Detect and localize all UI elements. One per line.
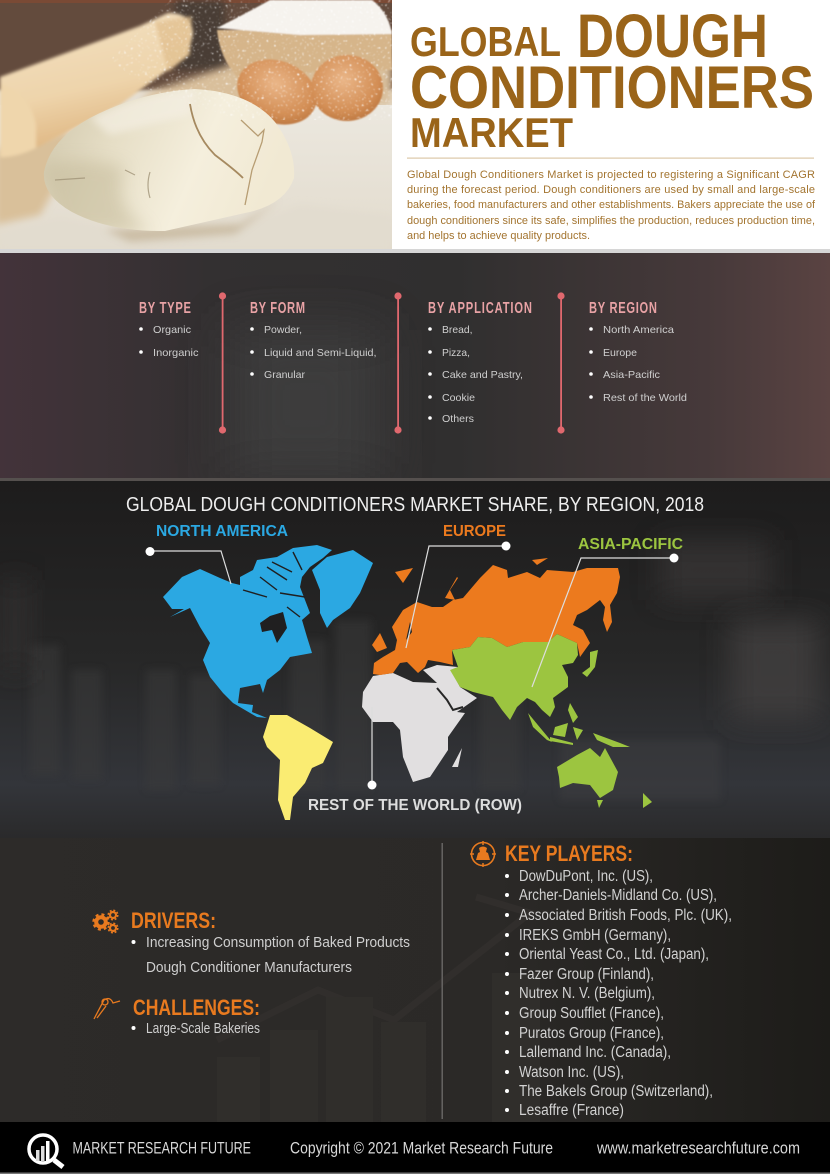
segment dividers — [219, 292, 565, 434]
asia pacific — [450, 634, 652, 808]
footer: Copyright © 2021 Market Research Future — [290, 1140, 553, 1158]
header photo: dough, rolling pin, eggs and flour — [0, 0, 410, 249]
column: by application: Cookie — [442, 392, 475, 404]
column: by form — [250, 299, 376, 381]
column: by application — [428, 299, 532, 425]
panel: drivers, challenges and key players — [0, 838, 830, 1122]
column: by region: Asia-Pacific — [603, 369, 660, 381]
column: by region: North America — [603, 324, 674, 336]
callout: north america: NORTH AMERICA — [156, 523, 288, 540]
europe and russia — [372, 558, 620, 675]
column: by region: BY REGION — [589, 299, 657, 316]
eggs — [236, 54, 384, 126]
intro paragraph: bakeries, food manufacturers and other establishments. Bakers appreciate the use of — [407, 199, 816, 211]
greenland — [312, 550, 373, 628]
icon: gears — [93, 910, 118, 933]
dough ball — [40, 89, 294, 232]
drivers: Dough Conditioner Manufacturers — [146, 960, 352, 976]
key players: Puratos Group (France), — [519, 1025, 664, 1042]
column: by form: Powder, — [264, 324, 302, 336]
callout: europe — [406, 523, 510, 648]
north america — [158, 545, 373, 718]
key players — [470, 841, 732, 1119]
africa and middle east — [362, 665, 477, 782]
callout: asia-pacific: ASIA-PACIFIC — [578, 536, 683, 553]
key players: Watson Inc. (US), — [519, 1064, 624, 1081]
challenges: CHALLENGES: — [133, 995, 260, 1020]
flour specks — [110, 0, 392, 125]
callout: rest of the world: REST OF THE WORLD (ROW) — [308, 797, 522, 814]
rolling pin — [0, 13, 193, 157]
column: by application: Pizza, — [442, 347, 470, 359]
title: market: MARKET — [410, 109, 573, 156]
callout: north america — [146, 523, 288, 584]
icon: uphill climber — [94, 999, 120, 1019]
challenges — [94, 995, 260, 1037]
key players: Nutrex N. V. (Belgium), — [519, 985, 655, 1002]
column: by type: BY TYPE — [139, 299, 191, 316]
drivers — [93, 908, 410, 976]
key players: Fazer Group (Finland), — [519, 966, 654, 983]
title: global: GLOBAL — [410, 18, 561, 65]
column: by application: Others — [442, 413, 474, 425]
footer: MARKET RESEARCH FUTURE — [72, 1140, 251, 1158]
arctic straits — [243, 552, 305, 617]
column: by form: Liquid and Semi-Liquid, — [264, 347, 376, 359]
column: by type: Inorganic — [153, 347, 198, 359]
callout: asia-pacific — [532, 536, 683, 687]
callout: europe: EUROPE — [443, 523, 506, 540]
footer: www.marketresearchfuture.com — [596, 1140, 800, 1158]
key players: Associated British Foods, Plc. (UK), — [519, 907, 732, 924]
title block — [410, 2, 814, 156]
column: by application: Bread, — [442, 324, 472, 336]
column: by application: Cake and Pastry, — [442, 369, 523, 381]
column: by type — [139, 299, 198, 359]
panel: regional map — [0, 481, 830, 838]
key players: Archer-Daniels-Midland Co. (US), — [519, 887, 717, 904]
drivers: DRIVERS: — [131, 908, 216, 933]
challenges: Large-Scale Bakeries — [146, 1021, 260, 1037]
column: by region: Europe — [603, 347, 637, 359]
key players: Oriental Yeast Co., Ltd. (Japan), — [519, 946, 709, 963]
callout: rest of the world — [308, 707, 522, 814]
column: by application: BY APPLICATION — [428, 299, 532, 316]
column: by region — [589, 299, 687, 404]
panel: market segments — [0, 253, 830, 481]
key players: Group Soufflet (France), — [519, 1005, 664, 1022]
intro paragraph: dough conditioners since its safe, simplifies the production, reduces production time, — [407, 215, 815, 227]
column: by form: BY FORM — [250, 299, 305, 316]
flour bowl — [217, 0, 392, 80]
title: dough: DOUGH — [577, 2, 768, 70]
icon: target person — [470, 841, 496, 867]
key players: DowDuPont, Inc. (US), — [519, 868, 653, 885]
south america — [263, 715, 333, 820]
footer — [0, 1122, 830, 1174]
divider strip under header — [0, 249, 830, 253]
icon: market research logo — [29, 1135, 63, 1167]
intro paragraph — [407, 169, 816, 242]
key players: KEY PLAYERS: — [505, 841, 633, 866]
column: by form: Granular — [264, 369, 305, 381]
intro paragraph: during the forecast period. Dough conditioners are used by small and large-scale — [407, 184, 815, 196]
key players: Lallemand Inc. (Canada), — [519, 1044, 671, 1061]
world map — [158, 545, 652, 820]
key players: The Bakels Group (Switzerland), — [519, 1083, 713, 1100]
map heading: GLOBAL DOUGH CONDITIONERS MARKET SHARE, BY REGION, 2018 — [126, 494, 704, 516]
hudson bay — [260, 612, 287, 643]
key players: IREKS GmbH (Germany), — [519, 927, 671, 944]
intro paragraph: and helps to achieve quality products. — [407, 230, 590, 242]
column: by region: Rest of the World — [603, 392, 687, 404]
drivers: Increasing Consumption of Baked Products — [146, 935, 410, 951]
column: by type: Organic — [153, 324, 191, 336]
key players: Lesaffre (France) — [519, 1102, 624, 1119]
intro paragraph: Global Dough Conditioners Market is projected to registering a Significant CAGR — [407, 169, 815, 181]
